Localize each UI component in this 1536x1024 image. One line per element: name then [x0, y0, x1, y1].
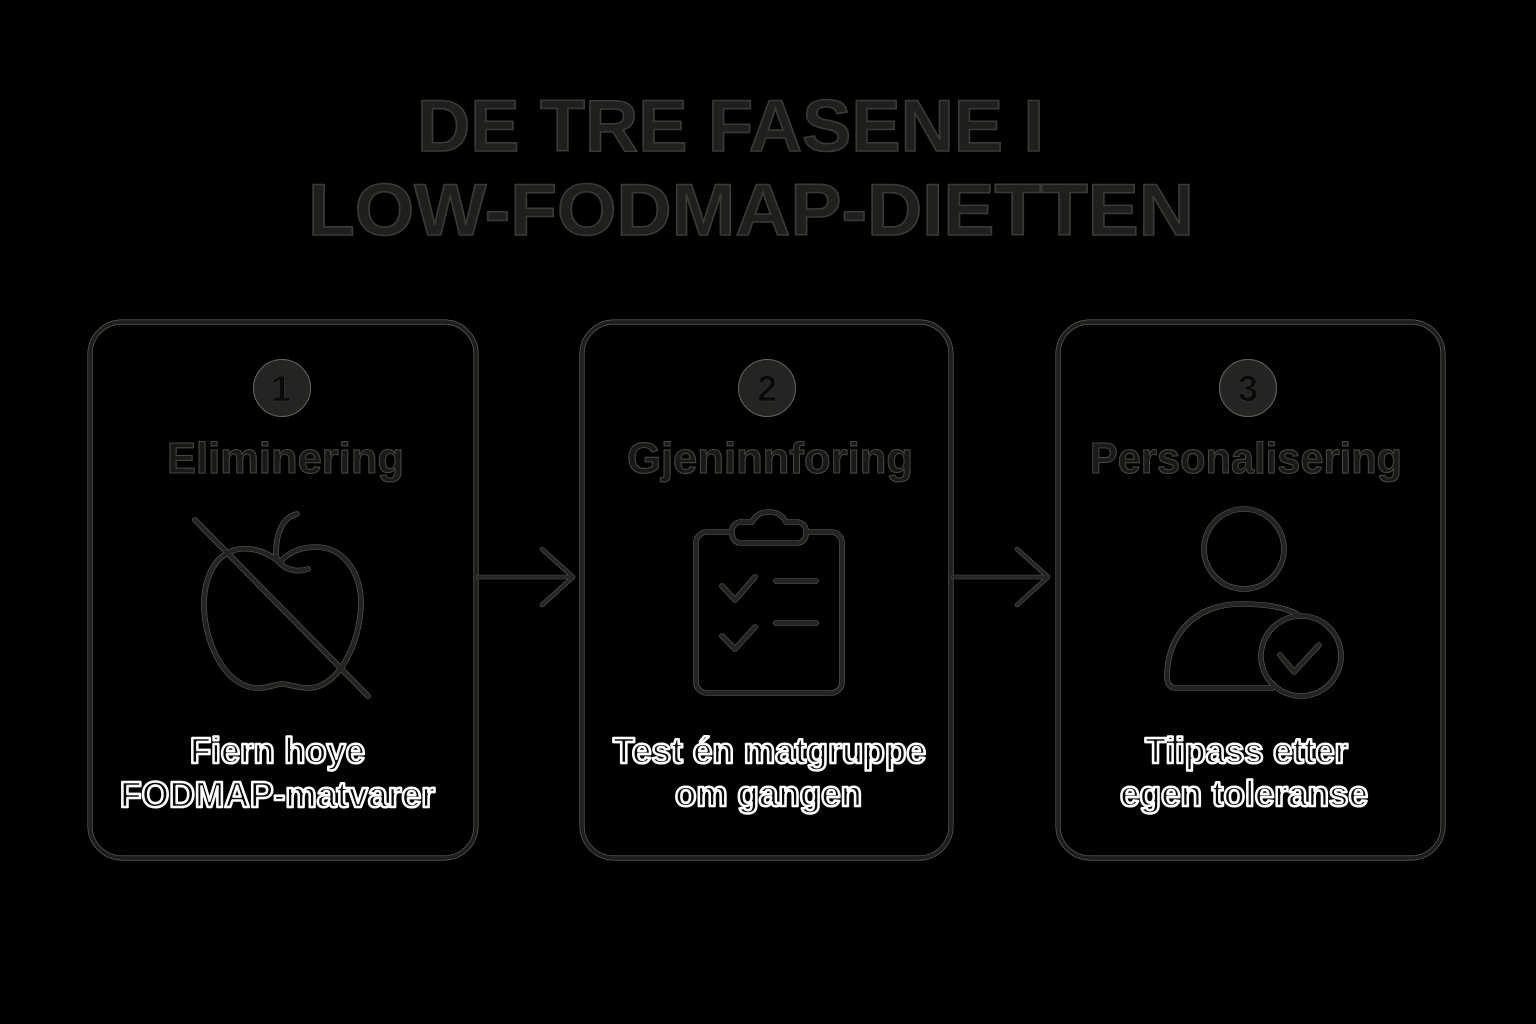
- panel: Eliminering: [90, 322, 476, 858]
- title: [308, 86, 1194, 251]
- text: adapt to own tolerance: egen toleranse: [1120, 773, 1368, 814]
- text: test one food group: om gangen: [675, 773, 862, 814]
- text: adapt to own tolerance: Tiipass etter: [1145, 730, 1348, 771]
- text: test one food group: [613, 730, 926, 814]
- number badge 3: [1220, 360, 1276, 416]
- heading: Gjeninnforing: Gjeninnforing: [627, 434, 913, 483]
- icon: clipboard checklist: [696, 512, 842, 693]
- text: remove high FODMAP foods: Fiern hoye: [190, 730, 365, 771]
- number badge 2: [738, 360, 796, 416]
- heading: Personalisering: Personalisering: [1090, 434, 1402, 483]
- heading: Eliminering: Eliminering: [167, 434, 404, 483]
- text: remove high FODMAP foods: FODMAP-matvarer: [120, 774, 435, 815]
- panel: Personalisering: [1058, 322, 1443, 858]
- title: LOW-FODMAP-DIETTEN: [308, 170, 1194, 251]
- number badge 2: 2: [757, 368, 777, 409]
- arrow: phase 2 to phase 3: [953, 549, 1048, 605]
- text: adapt to own tolerance: [1120, 730, 1368, 814]
- number badge 3: 3: [1238, 368, 1258, 409]
- title: DE TRE FASENE I: [417, 86, 1044, 167]
- text: test one food group: Test én matgruppe: [613, 730, 926, 771]
- text: remove high FODMAP foods: [120, 730, 435, 815]
- icon: crossed-out apple: [195, 514, 368, 696]
- icon: person with check badge: [1167, 509, 1341, 696]
- number badge 1: 1: [271, 368, 291, 409]
- arrow: phase 1 to phase 2: [478, 549, 573, 605]
- number badge 1: [254, 360, 310, 416]
- panel: Gjeninnforing: [582, 322, 951, 858]
